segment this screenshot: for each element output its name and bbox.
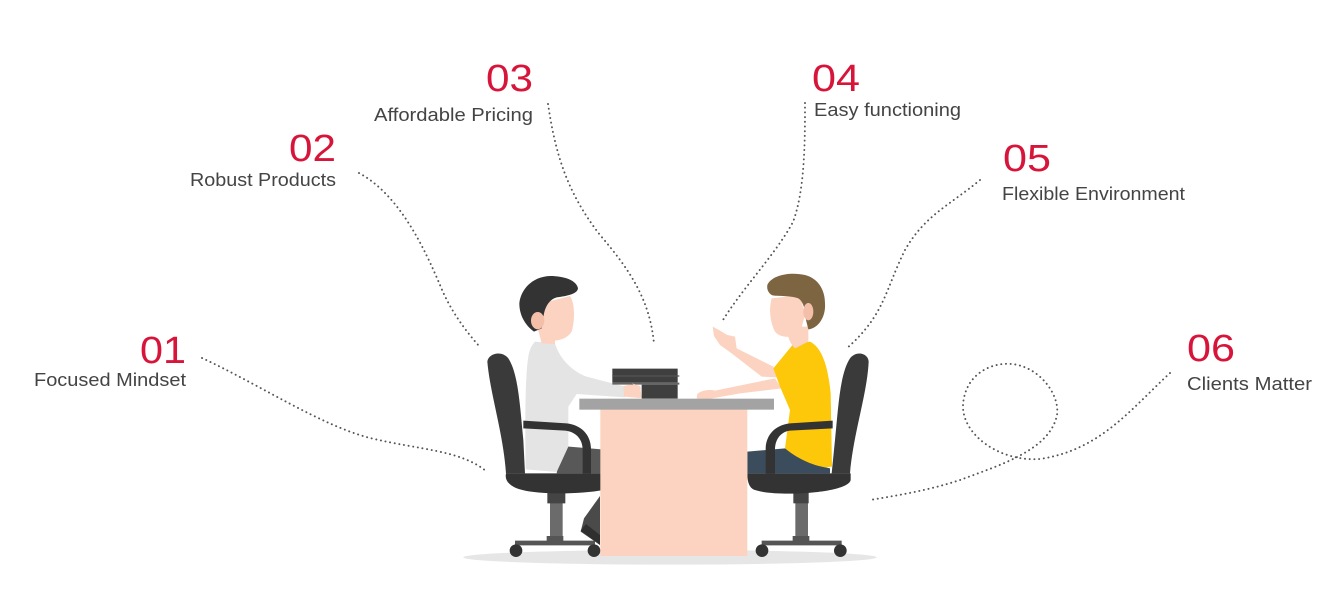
item 04: 04: [812, 58, 860, 100]
item 01: Focused Mindset: [34, 369, 186, 390]
item 02: [190, 128, 336, 190]
item 04: Easy functioning: [814, 99, 961, 120]
dotted connector 02: [359, 173, 479, 346]
left man: [519, 276, 641, 545]
item 03: 03: [486, 58, 533, 100]
dotted connector 05: [846, 180, 980, 349]
item 02: 02: [289, 128, 336, 170]
item 03: [374, 58, 533, 125]
left chair: [487, 354, 603, 557]
item 05: Flexible Environment: [1002, 183, 1185, 204]
item 03: Affordable Pricing: [374, 104, 533, 125]
item 04: [812, 58, 961, 120]
item 05: [1002, 138, 1185, 204]
item 06: [1187, 328, 1312, 394]
item 06: Clients Matter: [1187, 373, 1312, 394]
dotted connector 06 with loop: [870, 364, 1170, 500]
right armrest: [766, 421, 833, 473]
dotted connector 01: [202, 358, 486, 471]
item 06: 06: [1187, 328, 1235, 370]
right man: [697, 274, 832, 473]
stack of books: [612, 369, 679, 399]
floor shadow: [463, 550, 877, 565]
desk: [579, 399, 774, 556]
dotted connector 04: [723, 103, 805, 320]
item 05: 05: [1003, 138, 1051, 180]
item 01: [34, 330, 186, 390]
item 02: Robust Products: [190, 169, 336, 190]
right chair: [747, 354, 869, 557]
illustration: two people at a desk: [463, 274, 877, 565]
dotted connector 03: [548, 104, 654, 344]
left armrest: [523, 421, 591, 473]
item 01: 01: [140, 330, 186, 372]
